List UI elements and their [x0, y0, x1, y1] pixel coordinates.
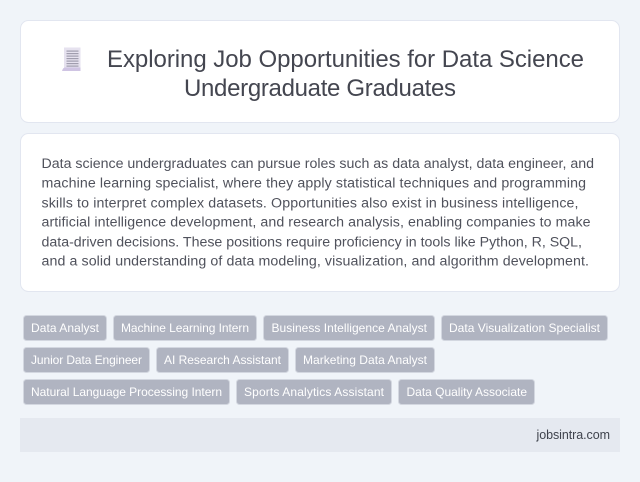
text block: description: and a solid understanding of data modeling, visualization, and algorithm development. — [42, 254, 589, 270]
title: Undergraduate Graduates — [184, 75, 456, 102]
footer source text: jobsintra.com — [536, 428, 610, 442]
text block: description: machine learning specialist, where they apply statistical techniques and programming — [42, 176, 586, 192]
text block: description — [42, 156, 594, 270]
tag: Sports Analytics Assistant — [236, 380, 392, 404]
tag: Data Analyst — [24, 316, 106, 340]
tag: Sports Analytics Assistant: Sports Analytics Assistant — [244, 385, 385, 399]
tag: Data Quality Associate — [398, 380, 534, 404]
text block: description: Data science undergraduates can pursue roles such as data analyst, data engineer, and — [42, 156, 594, 172]
tag: Data Visualization Specialist: Data Visualization Specialist — [449, 321, 601, 335]
panel: description — [20, 134, 620, 292]
footer bar — [20, 418, 620, 452]
tag: Natural Language Processing Intern: Natural Language Processing Intern — [31, 385, 222, 399]
icon: paper scroll — [62, 48, 80, 71]
tag: Marketing Data Analyst — [296, 348, 434, 372]
text block: description: artificial intelligence development, and research analysis, enabling companies to make — [42, 214, 591, 230]
tag: Data Quality Associate: Data Quality Associate — [406, 385, 527, 399]
panel: title header — [20, 20, 620, 122]
tag: Junior Data Engineer — [24, 348, 150, 372]
title: Exploring Job Opportunities for Data Science — [107, 46, 584, 73]
text block: description: data-driven decisions. These positions require proficiency in tools like Python, R, SQL, — [42, 234, 582, 250]
tag: Data Visualization Specialist — [442, 316, 608, 340]
tag: Machine Learning Intern — [114, 316, 256, 340]
tag: Business Intelligence Analyst — [264, 316, 434, 340]
tag: Business Intelligence Analyst: Business Intelligence Analyst — [272, 321, 428, 335]
text block: description: skills to interpret complex datasets. Opportunities also exist in business intelligence, — [42, 196, 578, 212]
tag list: job roles — [24, 316, 608, 404]
tag: Marketing Data Analyst: Marketing Data Analyst — [303, 353, 428, 367]
tag: AI Research Assistant — [156, 348, 288, 372]
tag: Machine Learning Intern: Machine Learning Intern — [121, 321, 249, 335]
tag: AI Research Assistant: AI Research Assistant — [164, 353, 282, 367]
tag: Junior Data Engineer: Junior Data Engineer — [31, 353, 142, 367]
tag: Natural Language Processing Intern — [24, 380, 230, 404]
title — [107, 46, 584, 102]
tag: Data Analyst: Data Analyst — [31, 321, 100, 335]
